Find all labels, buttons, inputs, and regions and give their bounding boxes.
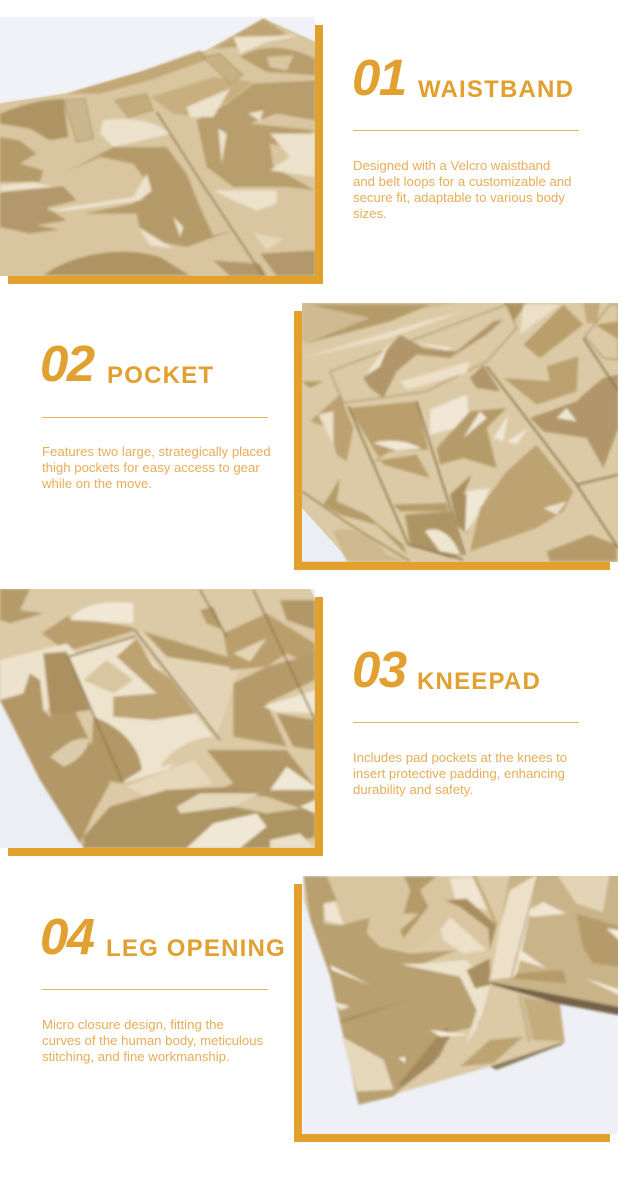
heading: 03 kneepad: 03: [352, 641, 406, 698]
description: kneepad: durability and safety.: [353, 782, 473, 797]
description: waistband: [353, 158, 571, 221]
panel: leg opening: [40, 876, 618, 1142]
panel: kneepad: [0, 589, 579, 856]
divider: [42, 417, 268, 418]
description: kneepad: insert protective padding, enhancing: [353, 766, 565, 781]
description: waistband: Designed with a Velcro waistband: [353, 158, 550, 173]
accent frame: left bar: [294, 884, 302, 1142]
panel: pocket: [40, 303, 618, 570]
panel: waistband: [0, 17, 579, 284]
heading: 04 leg opening: LEG OPENING: [106, 934, 286, 962]
heading: 01 waistband: WAISTBAND: [418, 76, 574, 102]
description: leg opening: [42, 1017, 263, 1064]
accent frame: bottom bar: [294, 1134, 610, 1142]
description: pocket: while on the move.: [42, 476, 152, 491]
divider: [353, 130, 579, 131]
description: leg opening: Micro closure design, fitting the: [42, 1017, 224, 1032]
description: leg opening: curves of the human body, meticulous: [42, 1033, 263, 1048]
accent frame: bottom bar: [8, 276, 323, 284]
accent frame: right bar: [315, 25, 323, 284]
photo: trouser leg hem: [302, 876, 618, 1134]
heading: 02 pocket: [40, 335, 214, 392]
heading: 02 pocket: POCKET: [107, 362, 214, 388]
accent frame: right bar: [315, 597, 323, 856]
heading: 04 leg opening: 04: [40, 908, 94, 965]
description: kneepad: [353, 750, 567, 797]
description: waistband: sizes.: [353, 206, 387, 221]
photo: knee pad pocket: [0, 589, 315, 848]
heading: 02 pocket: 02: [40, 335, 94, 392]
photo: thigh cargo pocket: [302, 303, 618, 562]
description: kneepad: Includes pad pockets at the knees to: [353, 750, 567, 765]
description: leg opening: stitching, and fine workmanship.: [42, 1049, 230, 1064]
accent frame: bottom bar: [8, 848, 323, 856]
heading: 01 waistband: 01: [352, 49, 406, 106]
accent frame: bottom bar: [294, 562, 610, 570]
heading: 04 leg opening: [40, 908, 286, 965]
divider: [353, 722, 579, 723]
divider: [42, 989, 268, 990]
description: waistband: and belt loops for a customizable and: [353, 174, 571, 189]
photo: waistband of camouflage trousers: [0, 17, 315, 276]
heading: 03 kneepad: [352, 641, 541, 698]
heading: 01 waistband: [352, 49, 574, 106]
description: pocket: Features two large, strategically placed: [42, 444, 271, 459]
description: pocket: thigh pockets for easy access to gear: [42, 460, 260, 475]
description: pocket: [42, 444, 271, 491]
accent frame: left bar: [294, 311, 302, 570]
heading: 03 kneepad: KNEEPAD: [417, 668, 541, 694]
description: waistband: secure fit, adaptable to various body: [353, 190, 565, 205]
